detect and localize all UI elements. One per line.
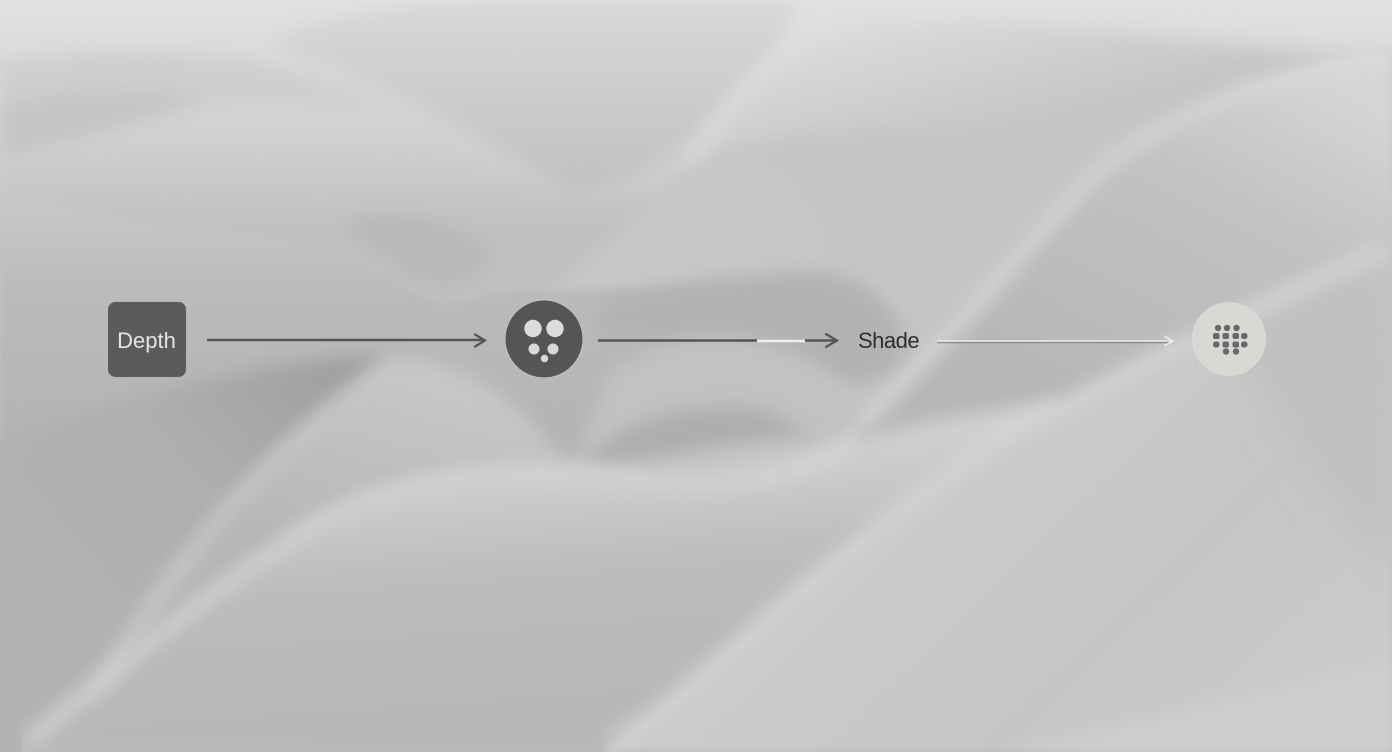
icon: dark circle with dots bbox=[505, 300, 583, 378]
arrow: Shade to grid circle bbox=[938, 336, 1173, 346]
arrow: circle to Shade bbox=[598, 334, 837, 347]
node: Depth box: Depth bbox=[117, 328, 176, 353]
icon: light circle with dot grid bbox=[1192, 302, 1266, 376]
label: Shade: Shade bbox=[858, 328, 919, 353]
arrow: Depth to circle bbox=[208, 334, 485, 346]
node: Depth box bbox=[108, 302, 186, 378]
